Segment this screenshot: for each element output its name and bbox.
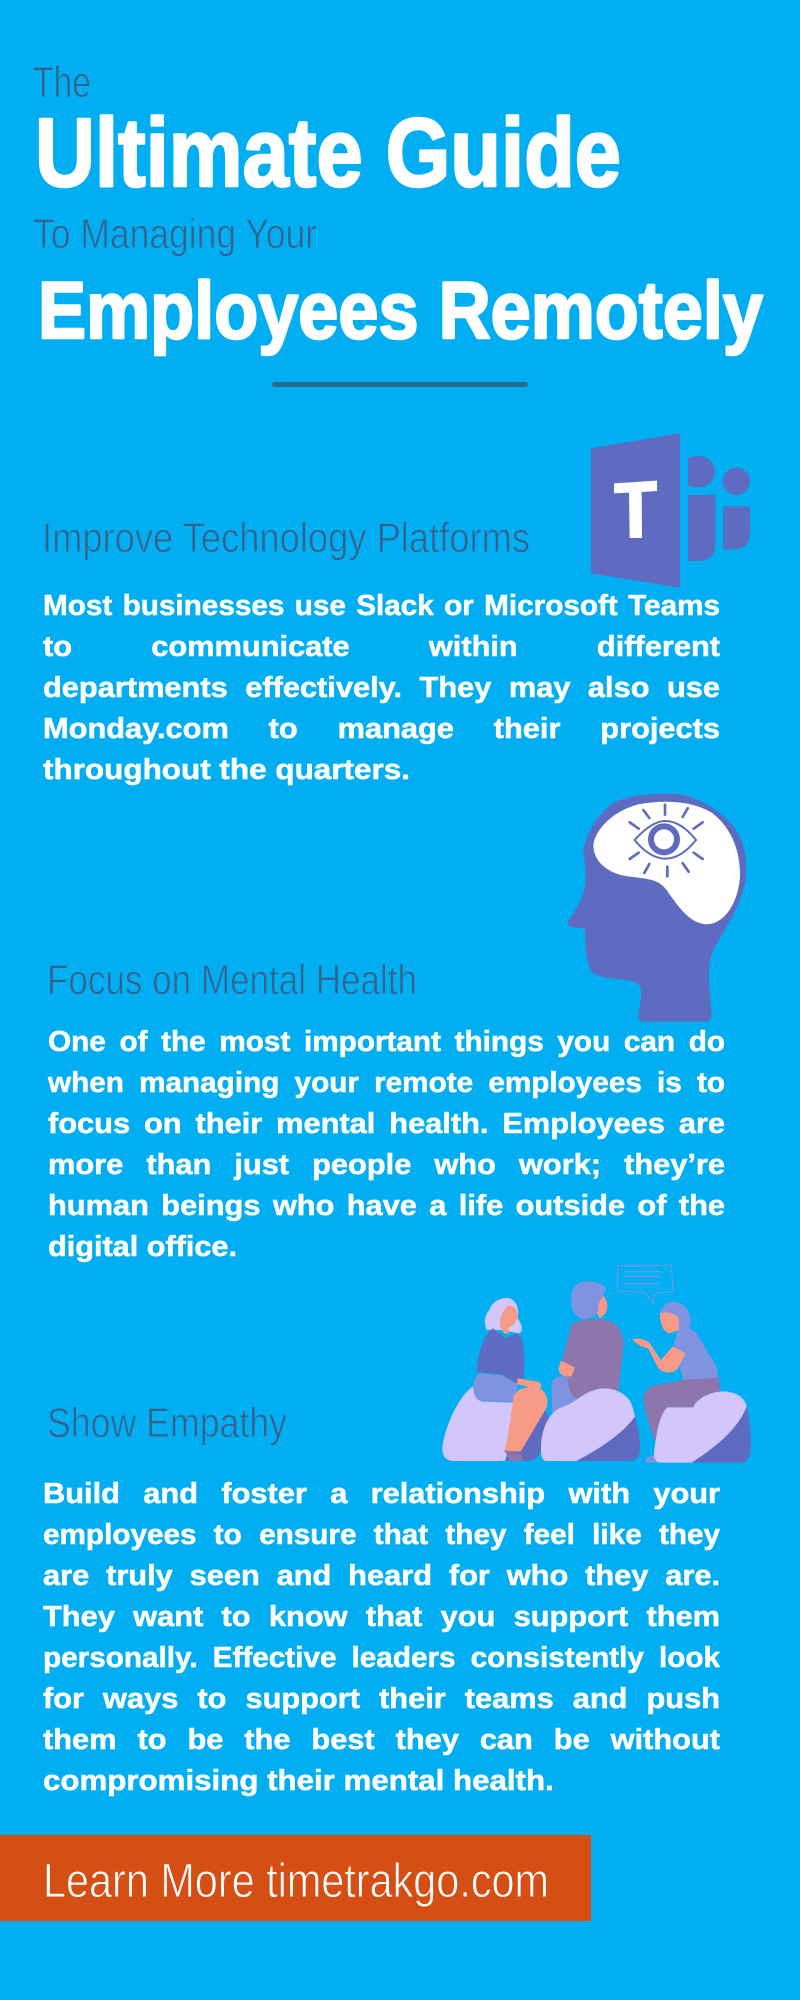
call to action bar: Learn More timetrakgo.com [43, 1855, 549, 1908]
title: To Managing Your [33, 210, 317, 257]
icon: head with eye [567, 794, 746, 1022]
call to action bar [0, 1835, 591, 1921]
title: The [33, 58, 91, 107]
text block: focus on mental health: digital office. [48, 1231, 237, 1262]
text block: improve technology platforms: Most businesses use Slack or Microsoft Teams [43, 590, 720, 621]
text block: focus on mental health: One of the most important things you can do [48, 1026, 725, 1057]
text block: show empathy: them to be the best they can be without [43, 1724, 720, 1755]
text block: show empathy: for ways to support their teams and push [43, 1683, 720, 1714]
title [33, 58, 763, 356]
speech bubble [618, 1265, 674, 1303]
text block: improve technology platforms: to communicate within different [43, 631, 720, 662]
text block: focus on mental health: human beings who have a life outside of the [48, 1190, 725, 1221]
text block: focus on mental health: focus on their mental health. Employees are [48, 1108, 725, 1139]
icon: microsoft teams logo [591, 433, 750, 588]
text block: show empathy: employees to ensure that they feel like they [43, 1519, 720, 1550]
text block: improve technology platforms [43, 590, 720, 786]
right person on bean bag [633, 1302, 751, 1463]
title: Ultimate Guide [35, 98, 621, 207]
text block: show empathy: compromising their mental health. [43, 1765, 554, 1796]
illustration: three people talking on bean bags [442, 1265, 751, 1463]
text block: improve technology platforms: Monday.com to manage their projects [43, 713, 720, 744]
left person on bean bag [442, 1298, 548, 1461]
heading: improve technology platforms: Improve Technology Platforms [42, 514, 530, 561]
text block: show empathy: personally. Effective leaders consistently look [43, 1642, 720, 1673]
text block: improve technology platforms: throughout the quarters. [43, 754, 410, 785]
text block: focus on mental health: more than just people who work; they’re [48, 1149, 725, 1180]
middle person on bean bag [541, 1281, 640, 1461]
text block: show empathy [43, 1478, 720, 1796]
text block: focus on mental health [48, 1026, 725, 1262]
heading: focus on mental health: Focus on Mental Health [47, 956, 417, 1003]
text block: improve technology platforms: departments effectively. They may also use [43, 672, 720, 703]
text block: show empathy: They want to know that you support them [43, 1601, 720, 1632]
heading: show empathy: Show Empathy [47, 1399, 287, 1446]
text block: show empathy: Build and foster a relationship with your [43, 1478, 720, 1509]
text block: focus on mental health: when managing your remote employees is to [48, 1067, 725, 1098]
text block: show empathy: are truly seen and heard for who they are. [43, 1560, 720, 1591]
